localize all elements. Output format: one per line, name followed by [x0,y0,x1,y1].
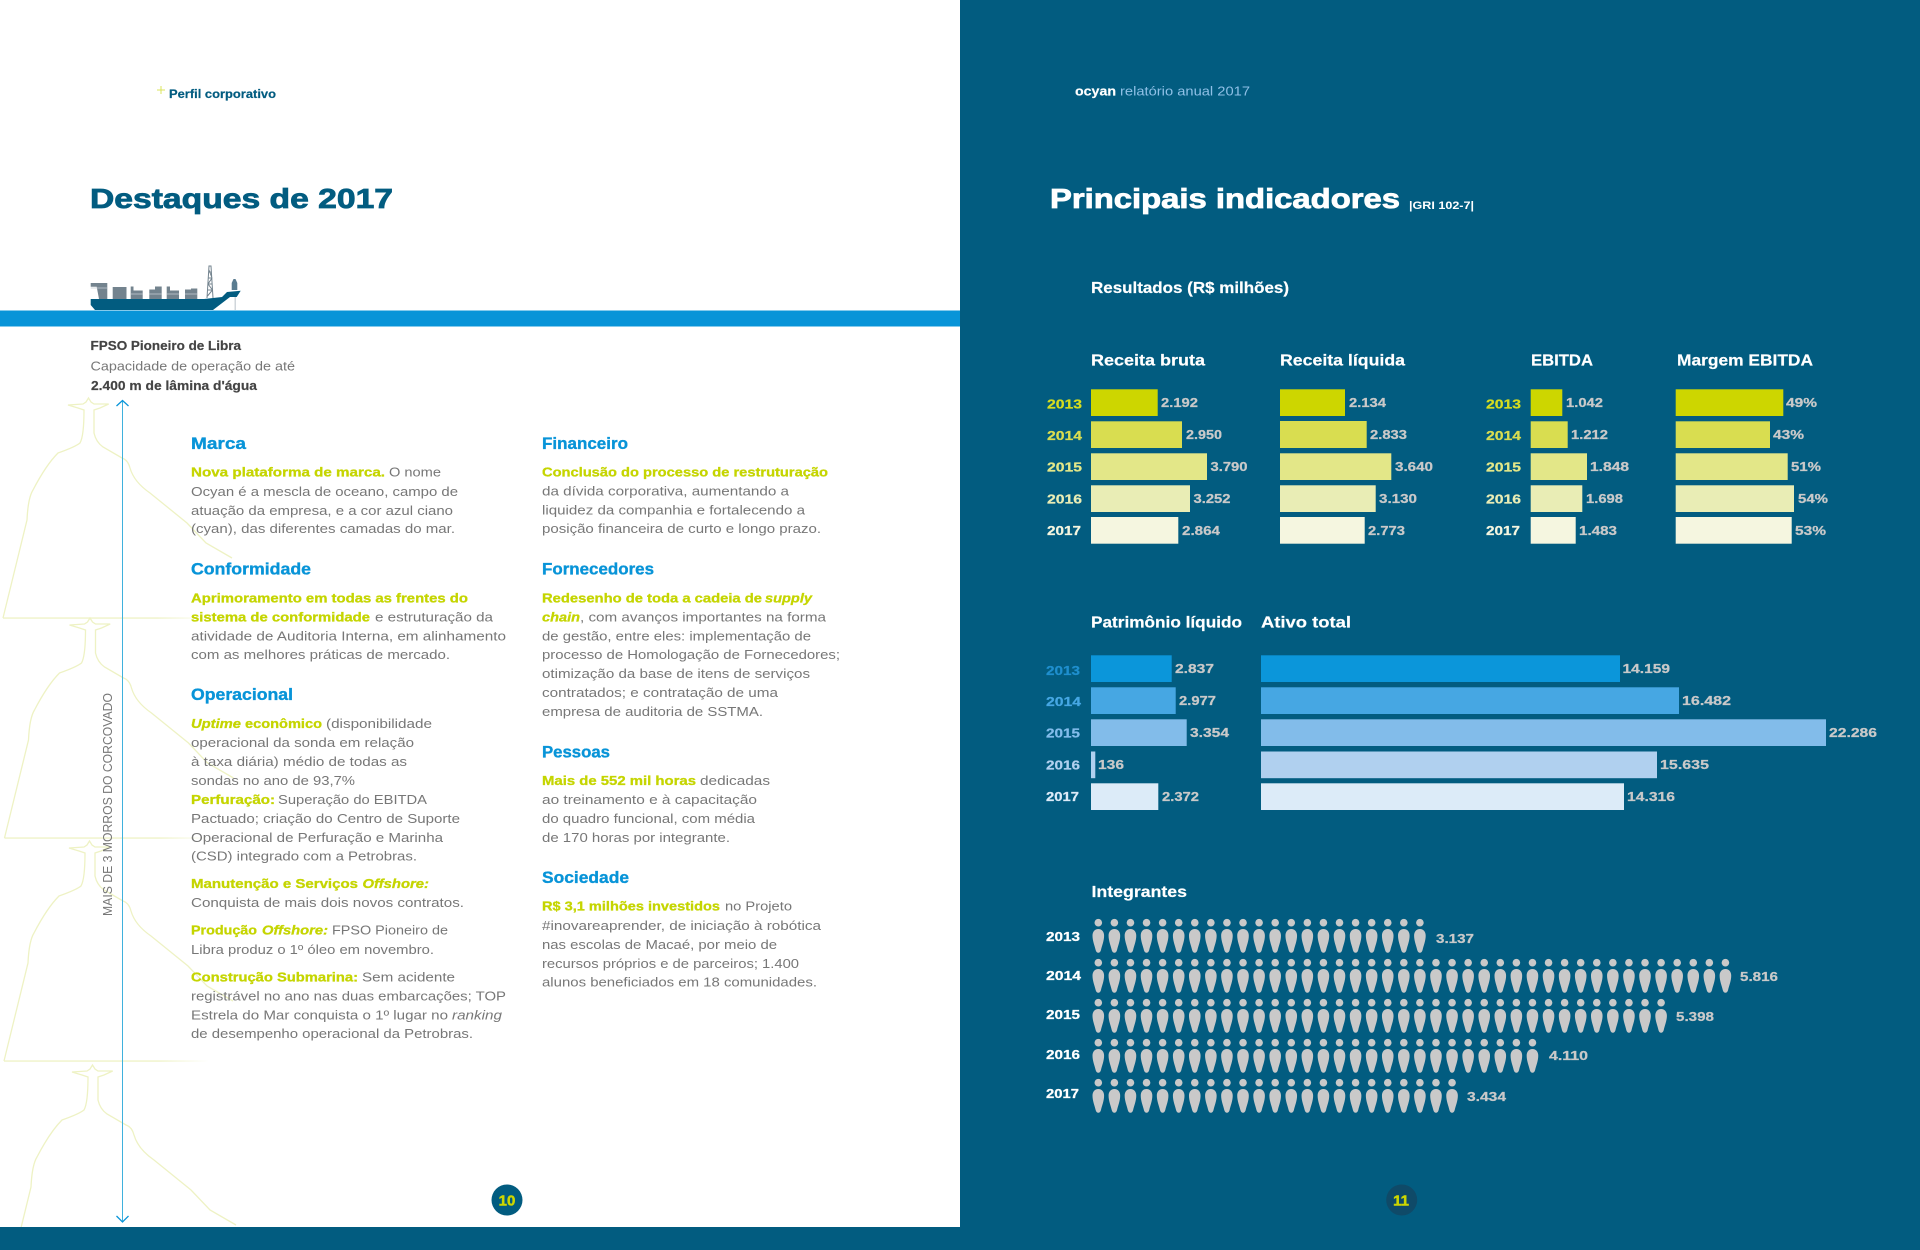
pictogram row: Integrantes 2013 [1046,919,1474,953]
year labels: EBITDA row: 2013 [1486,396,1521,412]
text block: Fornecedores: processo de Homologação de Fornecedores; [542,647,840,662]
text block: Operacional: Libra produz o 1º óleo em novembro. [191,942,434,957]
bar chart: Ativo total: Ativo total [1261,614,1351,632]
year labels: balance row: 2013 [1046,663,1080,678]
bar chart: Margem EBITDA: Margem EBITDA [1677,352,1813,370]
text block: Operacional: Perfuração: [191,792,275,807]
bar chart: Receita bruta: 3.252 [1194,491,1230,506]
text block: Marca: Nova plataforma de marca. [191,464,385,480]
page number 10: 10 [499,1192,515,1210]
bar chart: Receita líquida: 2.833 [1370,427,1407,442]
text block: Operacional [191,686,506,1041]
bar chart: Receita bruta: Receita bruta [1091,352,1205,370]
text block: Sociedade: nas escolas de Macaé, por meio de [542,937,777,952]
text block: Operacional: sondas no ano de 93,7% [191,773,355,788]
text block: Operacional: Offshore: [262,922,328,938]
text block: Fornecedores: Fornecedores [542,560,654,578]
year labels: EBITDA row: 2017 [1486,523,1520,538]
section marker: Perfil corporativo: Perfil corporativo [169,87,276,101]
year labels: balance row: 2017 [1046,789,1079,804]
title: Destaques de 2017: Destaques de 2017 [90,183,393,214]
bar chart: Receita líquida: 2.773 [1368,523,1405,538]
year labels: balance row: 2015 [1046,726,1080,740]
year labels: EBITDA row: 2014 [1486,428,1522,443]
text block: Fornecedores: contratados; e contratação de uma [542,685,779,700]
bar chart: Receita líquida [1280,352,1433,544]
pictogram row: Integrantes 2014: 5.816 [1740,969,1778,984]
pictogram row: Integrantes 2017: 3.434 [1467,1089,1507,1104]
report header [1075,84,1250,98]
text block: Conformidade: com as melhores práticas de mercado. [191,647,450,662]
bar chart: Margem EBITDA: 49% [1786,395,1818,410]
year labels: first results row: 2016 [1047,492,1082,506]
text block: Operacional: Manutenção e Serviços [191,876,358,891]
bar chart: Margem EBITDA [1676,352,1828,544]
text block: Operacional: Conquista de mais dois novos contratos. [191,895,464,910]
bar chart: Patrimônio líquido: 136 [1098,757,1124,772]
text block: Sociedade: recursos próprios e de parceiros; 1.400 [542,956,799,971]
text block: Operacional: Superação do EBITDA [278,792,427,807]
bar chart: Patrimônio líquido: 2.977 [1179,693,1216,708]
text block: Marca: (cyan), das diferentes camadas do mar. [191,521,455,536]
pictogram row: Integrantes 2014 [1046,959,1778,993]
caption: FPSO Pioneiro de Libra [90,338,295,393]
page number 11: 11 [1393,1192,1409,1210]
bar chart: Ativo total: 15.635 [1660,757,1709,772]
bar chart: Margem EBITDA: 43% [1773,427,1805,442]
year labels: first results row: 2013 [1047,396,1082,412]
pictogram row: Integrantes 2014: 2014 [1046,968,1082,983]
text block: Fornecedores: , com avanços importantes na forma [580,610,827,624]
illustration: Christ the Redeemer stacked outlines [3,398,236,1250]
bar chart: Patrimônio líquido: Patrimônio líquido [1091,614,1242,632]
text block: Operacional: de desempenho operacional da Petrobras. [191,1026,473,1041]
text block: Operacional: Construção Submarina: [191,970,358,984]
bar chart: Ativo total: 22.286 [1829,725,1877,740]
panel: left page background [0,0,960,1227]
text block: Operacional: ranking [452,1008,503,1022]
text block: Pessoas: do quadro funcional, com média [542,811,756,826]
page number 11 [1386,1184,1417,1216]
bar chart: Receita bruta [1091,352,1248,544]
text block: Operacional: Operacional [191,686,293,704]
panel: right page background [960,0,1920,1250]
year labels: first results row [1047,396,1083,538]
text block: Fornecedores: otimização da base de itens de serviços [542,666,810,681]
text block: Sociedade: no Projeto [725,898,792,914]
heading: Integrantes: Integrantes [1092,884,1187,901]
text block: Fornecedores [542,560,840,719]
text block: Operacional: Operacional de Perfuração e Marinha [191,830,444,845]
text block: Pessoas: dedicadas [700,773,770,788]
text block: Fornecedores: chain [542,610,580,624]
text block: Pessoas: Mais de 552 mil horas [542,773,696,788]
text block: Conformidade: Conformidade [191,560,311,578]
year labels: EBITDA row: 2016 [1486,492,1521,506]
bar chart: Margem EBITDA: 53% [1795,523,1827,538]
text block: Operacional: (CSD) integrado com a Petrobras. [191,848,417,864]
sea band [0,310,960,326]
bar chart: Receita bruta: 2.950 [1186,427,1222,442]
caption: FPSO Pioneiro de Libra: FPSO Pioneiro de Libra [90,338,242,353]
text block: Financeiro: posição financeira de curto e longo prazo. [542,521,821,536]
text block: Conformidade: sistema de conformidade [191,610,370,624]
year labels: balance row: 2014 [1046,694,1082,709]
bar chart: Ativo total [1261,614,1877,810]
bar chart: EBITDA: 1.848 [1590,459,1629,474]
bar chart: EBITDA: 1.698 [1586,491,1623,506]
text block: Pessoas: ao treinamento e à capacitação [542,792,757,807]
bar chart: Receita líquida: 3.640 [1395,459,1433,474]
depth scale label: MAIS DE 3 MORROS DO CORCOVADO [100,693,115,916]
bar chart: Receita líquida: 3.130 [1379,491,1417,506]
bar chart: Margem EBITDA: 51% [1791,459,1821,474]
text block: Conformidade: atividade de Auditoria Interna, em alinhamento [191,628,506,644]
title: Principais indicadores: Principais indicadores [1050,183,1400,214]
text block: Operacional: registrável no ano nas duas embarcações; TOP [191,988,506,1004]
text block: Pessoas: Pessoas [542,744,610,762]
text block: Marca [191,435,458,536]
text block: Financeiro: da dívida corporativa, aumentando a [542,484,790,498]
year labels: EBITDA row [1486,396,1522,538]
bar chart: EBITDA: 1.483 [1579,523,1617,538]
text block: Financeiro: Conclusão do processo de restruturação [542,464,828,480]
bar chart: Patrimônio líquido: 2.372 [1162,789,1199,804]
text block: Marca: Marca [191,435,247,453]
text block: Pessoas: de 170 horas por integrante. [542,830,730,845]
year labels: balance row [1046,663,1082,804]
text block: Operacional: operacional da sonda em relação [191,735,414,750]
text block: Operacional: Pactuado; criação do Centro de Suporte [191,811,460,826]
text block: Operacional: Produção [191,922,257,938]
text block: Conformidade: e estruturação da [375,610,494,624]
text block: Sociedade: Sociedade [542,869,629,887]
title: Principais indicadores: |GRI 102-7| [1409,200,1474,212]
text block: Operacional: (disponibilidade [326,716,432,731]
bar chart: Receita bruta: 3.790 [1210,459,1248,474]
arrow: depth scale [116,400,128,1222]
bar chart: EBITDA: 1.212 [1571,427,1608,442]
report header: ocyan [1075,84,1116,98]
text block: Sociedade: R$ 3,1 milhões investidos [542,898,720,914]
bottom band [0,1227,1920,1250]
bar chart: Receita bruta: 2.192 [1161,395,1198,410]
pictogram row: Integrantes 2017: 2017 [1046,1086,1079,1101]
text block: Operacional: Sem acidente [362,970,455,984]
caption: FPSO Pioneiro de Libra: 2.400 m de lâmina d'água [91,378,258,393]
text block: Conformidade [191,560,506,662]
pictogram row: Integrantes 2015: 2015 [1046,1007,1080,1022]
text block: Sociedade [542,869,822,990]
bar chart: Patrimônio líquido: 2.837 [1175,661,1214,676]
text block: Operacional: Estrela do Mar conquista o 1º lugar no [191,1008,448,1022]
pictogram row: Integrantes 2015: 5.398 [1676,1009,1714,1024]
year labels: EBITDA row: 2015 [1486,460,1521,474]
bar chart: Ativo total: 14.316 [1627,789,1675,804]
bar chart: EBITDA: EBITDA [1531,352,1593,370]
bar chart: Receita líquida: Receita líquida [1280,352,1405,370]
text block: Fornecedores: Redesenho de toda a cadeia de [542,590,762,606]
pictogram row: Integrantes 2016: 4.110 [1549,1048,1588,1063]
pictogram row: Integrantes 2017 [1046,1079,1507,1113]
text block: Pessoas [542,744,770,845]
icon: FPSO ship [91,266,241,310]
report header: relatório anual 2017 [1120,84,1250,98]
year labels: first results row: 2017 [1047,523,1081,538]
pictogram row: Integrantes 2015 [1046,999,1714,1033]
text block: Fornecedores: empresa de auditoria de SSTMA. [542,704,763,719]
text block: Financeiro: liquidez da companhia e fortalecendo a [542,502,806,518]
bar chart: EBITDA: 1.042 [1566,395,1603,410]
bar chart: Receita bruta: 2.864 [1182,523,1221,538]
text block: Operacional: à taxa diária) médio de todas as [191,754,407,769]
text block: Conformidade: Aprimoramento em todas as frentes do [191,590,468,606]
text block: Operacional: Offshore: [362,876,429,891]
text block: Operacional: econômico [245,716,322,731]
year labels: balance row: 2016 [1046,758,1080,772]
text block: Fornecedores: de gestão, entre eles: implementação de [542,628,811,644]
caption: FPSO Pioneiro de Libra: Capacidade de operação de até [90,358,295,374]
pictogram row: Integrantes 2016: 2016 [1046,1047,1080,1062]
bar chart: Receita líquida: 2.134 [1349,395,1387,410]
bar chart: Patrimônio líquido [1091,614,1242,810]
bar chart: Patrimônio líquido: 3.354 [1190,725,1230,740]
pictogram row: Integrantes 2013: 2013 [1046,929,1080,944]
year labels: first results row: 2015 [1047,460,1082,474]
text block: Financeiro [542,435,828,536]
text block: Sociedade: alunos beneficiados em 18 comunidades. [542,974,817,990]
text block: Fornecedores: supply [765,590,813,606]
year labels: first results row: 2014 [1047,428,1083,443]
text block: Operacional: Uptime [191,716,241,731]
text block: Marca: O nome [389,464,441,480]
bar chart: EBITDA [1531,352,1629,544]
pictogram row: Integrantes 2016 [1046,1039,1588,1073]
heading: Resultados: Resultados (R$ milhões) [1091,280,1289,297]
text block: Marca: atuação da empresa, e a cor azul ciano [191,503,453,518]
text block: Operacional: FPSO Pioneiro de [332,922,448,938]
bar chart: Ativo total: 16.482 [1682,693,1731,708]
pictogram row: Integrantes 2013: 3.137 [1436,931,1474,946]
bar chart: Margem EBITDA: 54% [1798,491,1828,506]
text block: Financeiro: Financeiro [542,435,628,453]
text block: Sociedade: #inovareaprender, de iniciação à robótica [542,918,822,933]
bar chart: Ativo total: 14.159 [1622,661,1670,676]
page number 10 [492,1184,522,1216]
text block: Marca: Ocyan é a mescla de oceano, campo de [191,484,458,499]
